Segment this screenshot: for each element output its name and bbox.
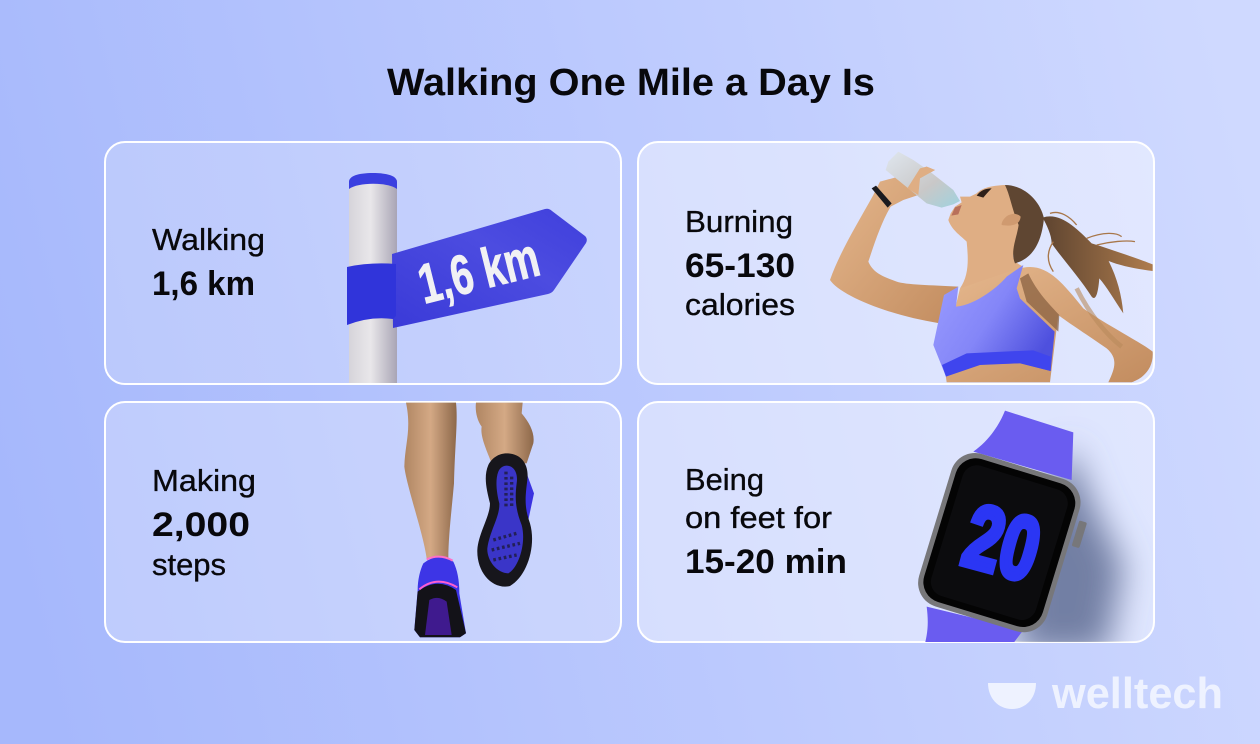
- water bottle: [886, 152, 960, 208]
- text: being on feet for 15-20 min: 15-20 min: [685, 543, 847, 581]
- text: burning 65-130 calories: 65-130: [685, 247, 795, 285]
- illustration: smartwatch: [912, 411, 1123, 653]
- text: making 2,000 steps: [152, 463, 256, 582]
- shadow: [1017, 447, 1123, 653]
- watch case: [918, 453, 1080, 632]
- text: walking 1,6 km: 1,6 km: [152, 265, 255, 303]
- icon: signpost: 1,6 km: [412, 225, 545, 316]
- illustration: woman drinking water: [830, 152, 1153, 382]
- text: making 2,000 steps: steps: [152, 547, 226, 582]
- illustration: running legs: [404, 403, 534, 637]
- logo: welltech: welltech: [1051, 669, 1223, 718]
- near arm: [830, 167, 958, 323]
- watch crown: [1072, 520, 1087, 548]
- sports top: [933, 265, 1055, 377]
- panel: steps: [105, 402, 621, 642]
- strap: [925, 411, 1073, 643]
- text: burning 65-130 calories: Burning: [685, 204, 793, 239]
- far arm and torso: [943, 267, 1153, 382]
- left leg: [404, 403, 457, 558]
- panel: time on feet: [638, 402, 1154, 653]
- panel: walking distance: [105, 142, 621, 384]
- ear: [1002, 214, 1021, 226]
- right leg: [476, 403, 534, 463]
- wristband: [872, 186, 892, 208]
- hair: [1005, 185, 1153, 347]
- text: walking 1,6 km: [152, 222, 265, 303]
- neck and face: [948, 185, 1027, 288]
- left shoe: [414, 557, 466, 637]
- watch number: 20: [954, 485, 1050, 601]
- text: being on feet for 15-20 min: Being: [685, 462, 764, 497]
- text: walking 1,6 km: Walking: [152, 222, 265, 257]
- panel: calories burned: [638, 142, 1154, 384]
- text: being on feet for 15-20 min: [685, 462, 847, 581]
- text: making 2,000 steps: 2,000: [152, 506, 250, 544]
- text: being on feet for 15-20 min: on feet for: [685, 500, 832, 535]
- icon: signpost: [347, 173, 587, 383]
- text: burning 65-130 calories: calories: [685, 287, 795, 322]
- title: Walking One Mile a Day Is: [387, 62, 875, 104]
- text: burning 65-130 calories: [685, 204, 795, 322]
- text: making 2,000 steps: Making: [152, 463, 256, 498]
- right shoe sole: [507, 473, 534, 520]
